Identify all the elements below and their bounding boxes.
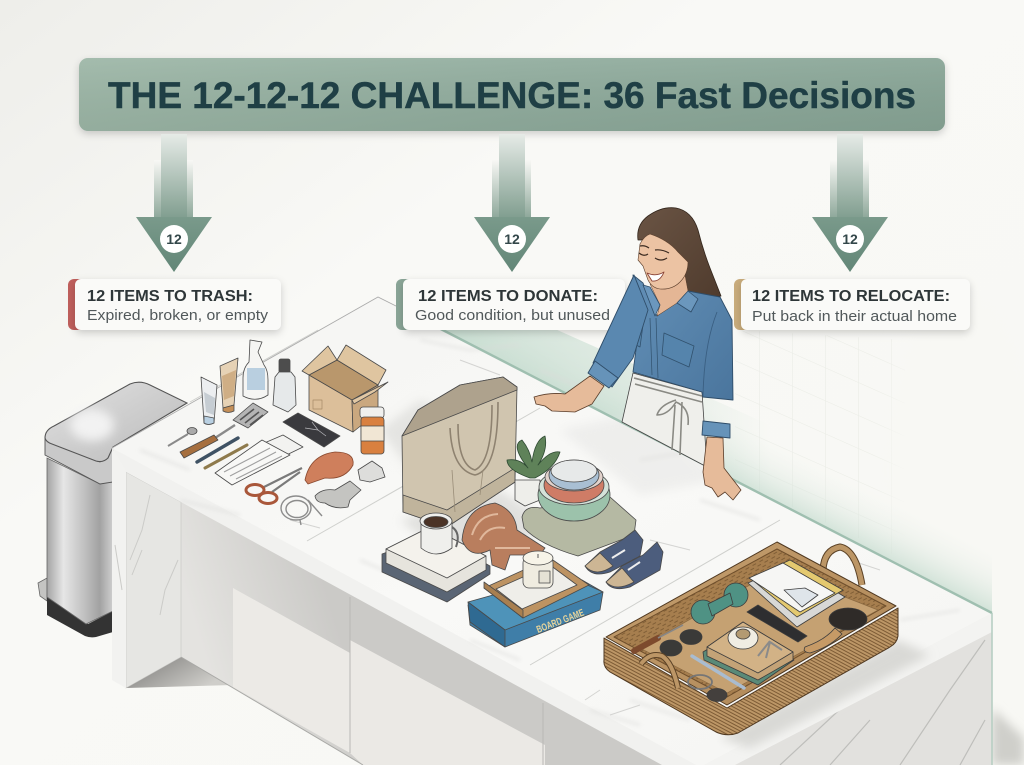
shirt body (633, 275, 733, 400)
base (47, 596, 113, 637)
right cuff (702, 421, 730, 438)
tray shadow (720, 640, 930, 748)
arrow: trash: 12 (166, 231, 182, 247)
tote bag (402, 377, 517, 527)
arrow: donate: 12 (504, 231, 520, 247)
left cuff (588, 361, 618, 388)
floor shadow (126, 657, 233, 688)
spatula (180, 403, 268, 458)
cable (281, 496, 322, 525)
arrow: relocate: 12 (842, 231, 858, 247)
label: trash: 12 ITEMS TO TRASH: (87, 288, 253, 305)
pen navy (197, 438, 238, 462)
label: relocate: Put back in their actual home (752, 309, 957, 325)
pump bottle (243, 340, 268, 399)
left sleeve (593, 275, 648, 387)
dumbbell (691, 583, 748, 624)
title banner (79, 58, 945, 131)
cardboard box (302, 345, 388, 432)
eyes and brows (639, 246, 669, 260)
woman (534, 208, 741, 500)
shirt pockets (628, 317, 694, 367)
label: donate: Good condition, but unused (415, 308, 610, 324)
pen gold (205, 445, 247, 468)
apron (622, 373, 707, 467)
neck (650, 275, 688, 316)
crumpled cup (358, 461, 385, 482)
marble countertop (112, 297, 992, 765)
folded blanket (522, 497, 636, 556)
left arm and hand (534, 376, 604, 412)
tray back handle (823, 547, 862, 585)
collar (643, 285, 698, 316)
tray inner wall (614, 549, 886, 697)
button placket (650, 318, 658, 378)
label: relocate (734, 279, 970, 330)
wicker tray (604, 542, 930, 748)
counter right end face (700, 613, 992, 765)
body (47, 458, 113, 624)
toothbrush (692, 656, 744, 688)
picture frame (484, 558, 589, 618)
tape roll (728, 627, 758, 649)
sock (315, 481, 361, 508)
envelopes (748, 560, 845, 627)
smile (647, 272, 664, 281)
candle (523, 551, 553, 588)
title text: THE 12-12-12 CHALLENGE: 36 Fast Decisions (108, 75, 916, 116)
apron ties (634, 378, 702, 455)
label: trash (68, 279, 281, 330)
lid band (45, 438, 113, 484)
hairbrush (804, 608, 867, 653)
shoes (585, 530, 663, 589)
arrow: relocate (812, 134, 888, 272)
tray items (634, 560, 867, 702)
scarf (462, 503, 545, 570)
sunglasses (660, 630, 702, 656)
floor shadow right (992, 708, 1024, 765)
label: relocate: 12 ITEMS TO RELOCATE: (752, 288, 950, 305)
tube silver (201, 377, 217, 424)
right arm and hand (703, 437, 741, 500)
tube beige (220, 358, 238, 412)
end panel (126, 472, 181, 688)
hair (638, 208, 721, 300)
right sleeve seam (703, 312, 717, 397)
label: donate (396, 279, 625, 330)
pedal (38, 578, 47, 601)
board game (468, 575, 603, 647)
fork (168, 428, 197, 446)
plant (507, 436, 560, 506)
counter base and cabinets (112, 448, 712, 765)
right lip (700, 613, 992, 765)
label: donate: 12 ITEMS TO DONATE: (418, 288, 598, 305)
broken phone (283, 413, 340, 447)
label: trash: Expired, broken, or empty (87, 308, 269, 324)
receipts (215, 435, 303, 485)
lit patch (233, 588, 350, 753)
arrow: trash (136, 134, 212, 272)
board game: BOARD GAME (535, 608, 586, 636)
tray front handle (641, 655, 678, 688)
cabinet face (181, 485, 712, 765)
trash can (38, 382, 187, 637)
glass backsplash (420, 292, 992, 613)
remote (747, 605, 807, 642)
books in tray (703, 622, 794, 685)
deflated balloon (305, 452, 353, 484)
donate items (382, 377, 663, 647)
wall tiles (735, 290, 1024, 650)
keys (758, 641, 782, 658)
books (382, 527, 490, 602)
pill bottle (360, 407, 384, 454)
face (638, 234, 688, 289)
clear bottle (273, 359, 296, 412)
trash items (168, 340, 388, 525)
lid top (45, 382, 187, 462)
bowls (538, 460, 610, 521)
arrow: donate (474, 134, 550, 272)
tray rim (606, 542, 896, 705)
scissors (246, 468, 302, 504)
screwdriver (634, 625, 683, 651)
tray floor (640, 570, 878, 693)
counter front lip (112, 448, 726, 765)
keychain (688, 675, 727, 702)
tray outer wall (604, 608, 898, 735)
coffee mug (420, 513, 458, 554)
